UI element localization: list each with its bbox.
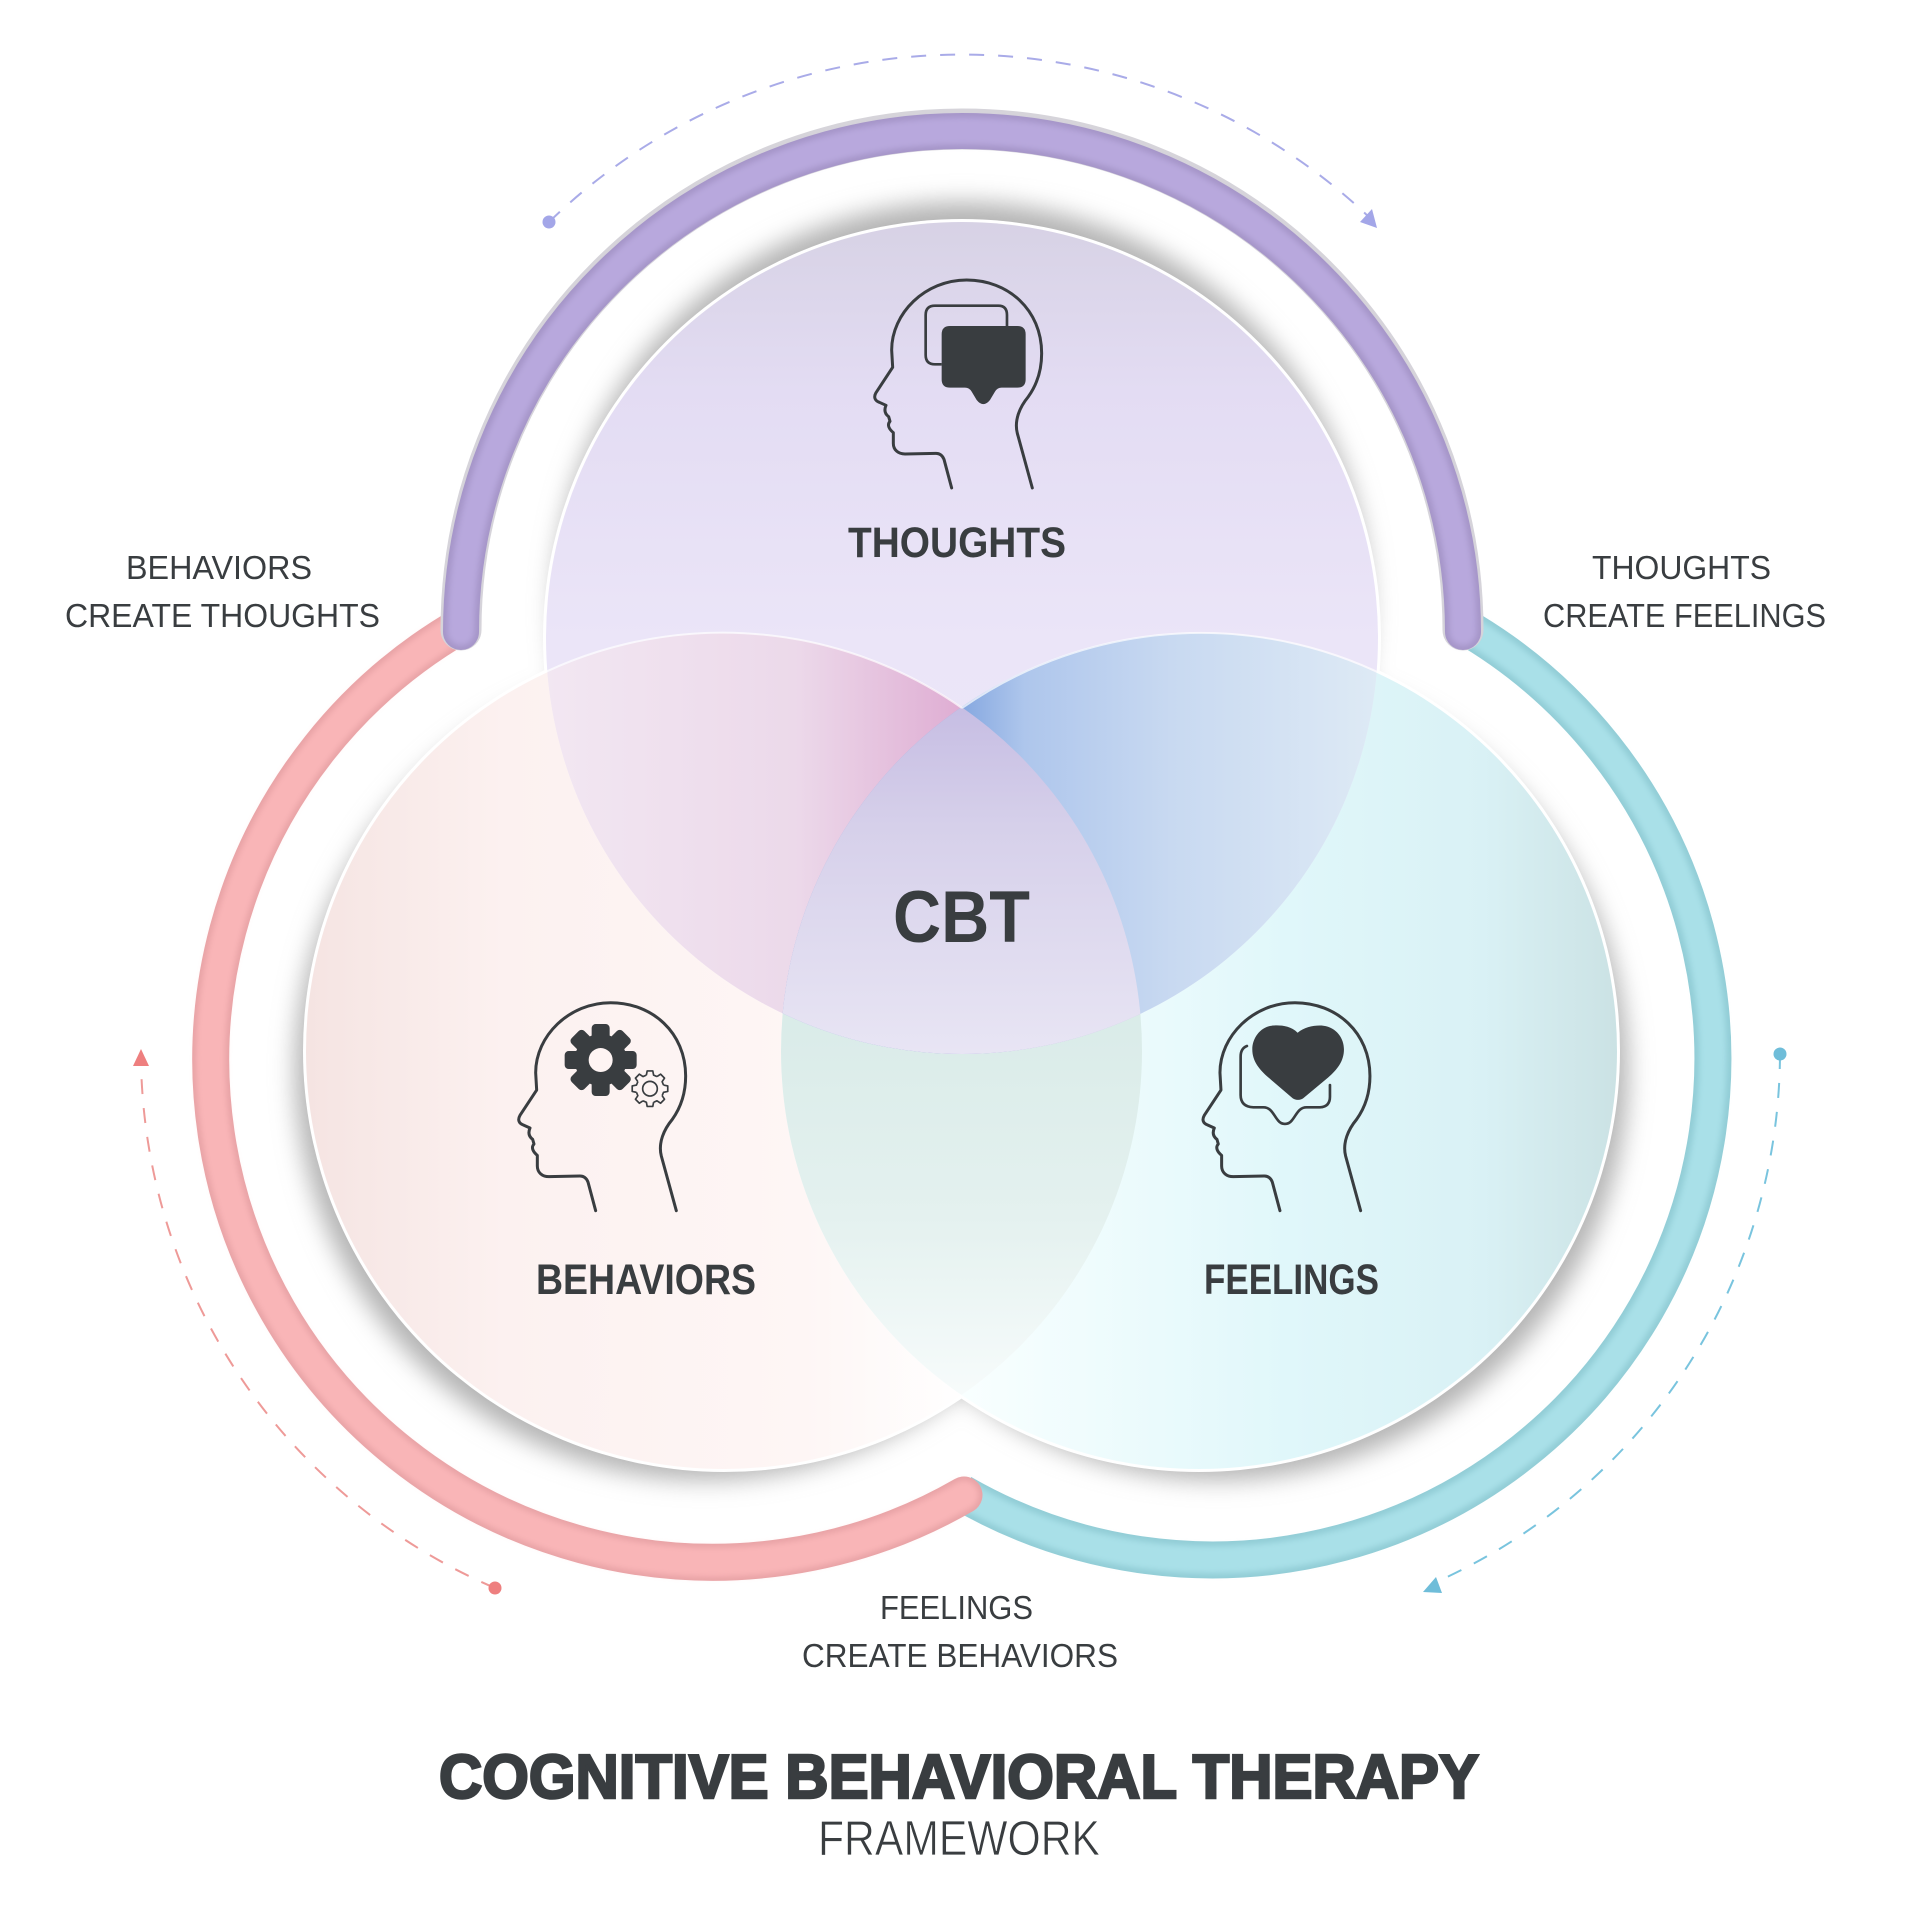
crescent shadows behind circles — [295, 202, 1628, 1480]
heading: feelings: FEELINGS — [1204, 1256, 1379, 1304]
label: feelings create behaviors — [802, 1589, 1118, 1674]
icon: head with speech bubbles — [875, 280, 1042, 488]
big gear — [565, 1024, 637, 1096]
venn diagram — [295, 202, 1628, 1480]
small gear — [632, 1071, 668, 1106]
title: COGNITIVE BEHAVIORAL THERAPY — [439, 1743, 1479, 1812]
subtitle: FRAMEWORK — [818, 1812, 1100, 1866]
icon: head with heart — [1203, 1003, 1370, 1211]
circle: thoughts — [546, 222, 1378, 1054]
overlap: behaviors and feelings — [781, 1014, 1142, 1340]
center label: CBT: CBT — [893, 877, 1030, 958]
heading: thoughts: THOUGHTS — [848, 519, 1066, 567]
dashed arrow: behaviors create thoughts — [542, 55, 1377, 228]
label: feelings create behaviors: FEELINGS — [880, 1589, 1033, 1626]
dashed arrow: feelings create behaviors — [133, 1049, 502, 1594]
circle: feelings — [781, 633, 1617, 1469]
heading: behaviors: BEHAVIORS — [536, 1256, 756, 1304]
ring segment: pink — [211, 625, 964, 1562]
label: thoughts create feelings: THOUGHTS — [1592, 549, 1771, 586]
ring segment: teal — [962, 625, 1713, 1560]
circle: behaviors — [306, 633, 1142, 1469]
label: behaviors create thoughts: CREATE THOUGHTS — [65, 597, 380, 634]
white highlight along overlap edges — [520, 633, 1403, 708]
label: thoughts create feelings: CREATE FEELINGS — [1543, 597, 1826, 634]
label: behaviors create thoughts: BEHAVIORS — [126, 549, 312, 586]
dashed arrow: thoughts create feelings — [1423, 1048, 1786, 1593]
label: thoughts create feelings — [1543, 549, 1826, 634]
label: behaviors create thoughts — [65, 549, 380, 634]
overlap: center CBT — [782, 708, 1140, 1054]
ring segment: purple — [461, 129, 1463, 632]
icon: head with gears — [519, 1003, 686, 1211]
label: feelings create behaviors: CREATE BEHAVIORS — [802, 1637, 1118, 1674]
white circle rims — [303, 219, 1620, 1472]
overlap: thoughts and feelings — [782, 633, 1376, 1054]
overlap: thoughts and behaviors — [610, 634, 1140, 1054]
